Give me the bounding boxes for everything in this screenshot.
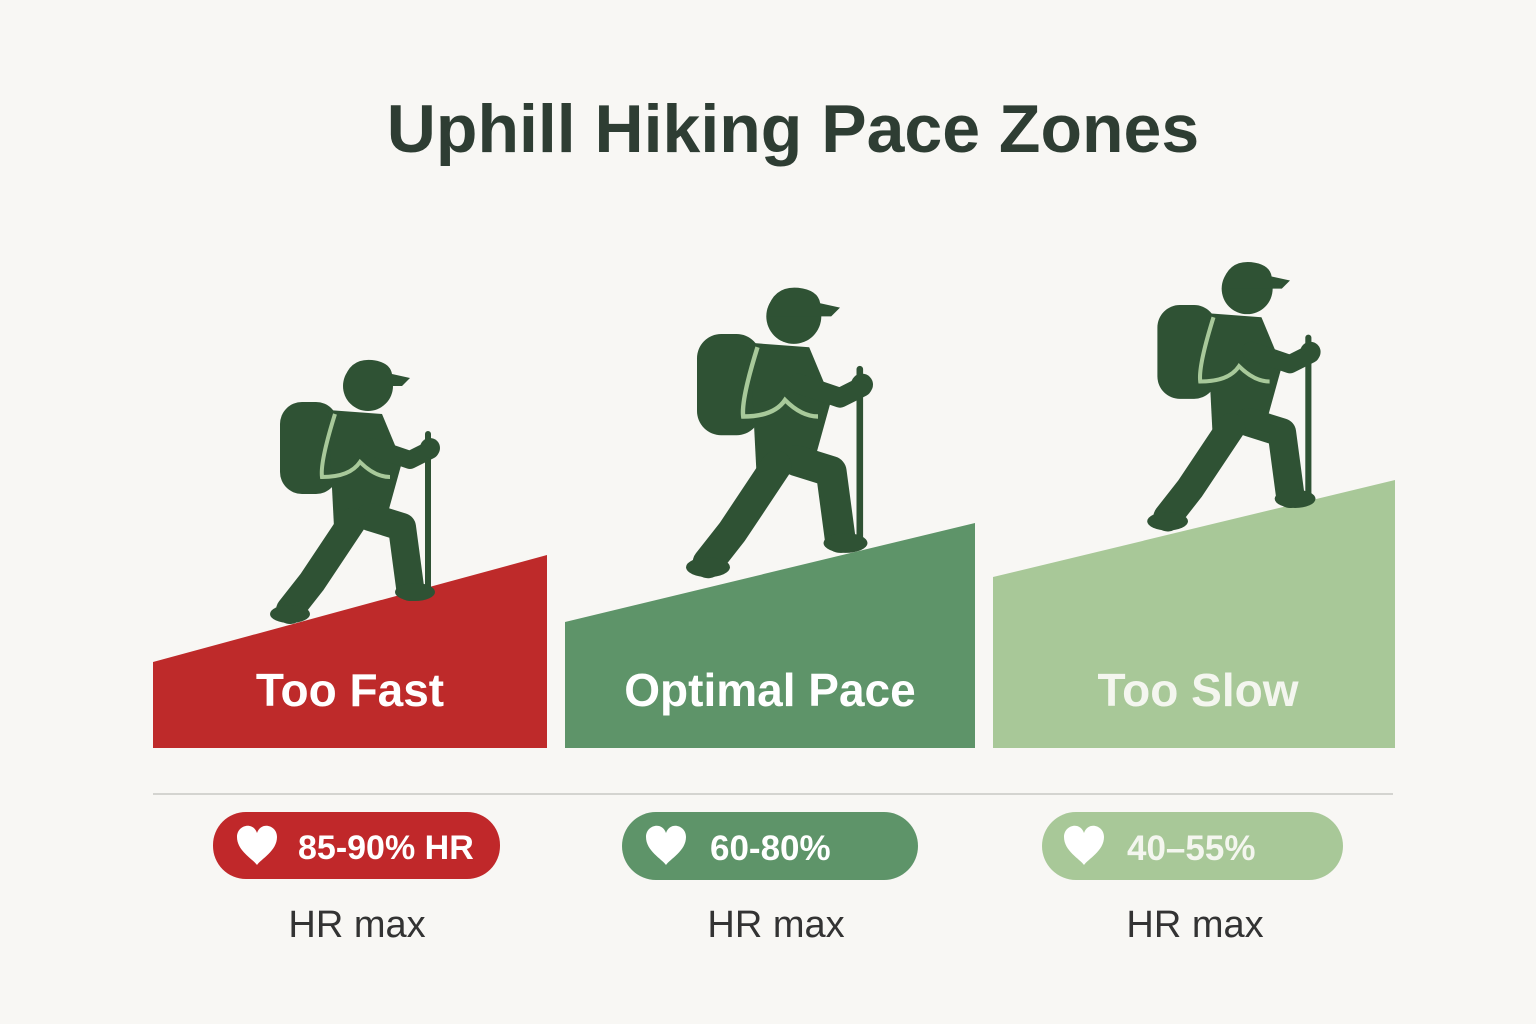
title: Uphill Hiking Pace Zones bbox=[387, 91, 1199, 167]
pill: too slow HR bbox=[1042, 812, 1343, 880]
icon: hiker too fast bbox=[270, 360, 440, 623]
label: too fast: Too Fast bbox=[256, 664, 444, 716]
ramp: optimal bbox=[565, 523, 975, 748]
pill: too fast HR: 85-90% HR bbox=[298, 829, 474, 867]
pill: optimal HR: 60-80% bbox=[710, 829, 831, 868]
icon: hiker too slow bbox=[1147, 262, 1321, 530]
icon: hiker optimal bbox=[686, 288, 873, 577]
ramp: too slow bbox=[993, 480, 1395, 748]
caption: HR max 1: HR max bbox=[288, 904, 426, 946]
ramp: too fast bbox=[153, 555, 547, 748]
pill: optimal HR bbox=[622, 812, 918, 880]
panel: optimal pace bbox=[565, 288, 975, 748]
caption: HR max 2: HR max bbox=[707, 904, 845, 946]
pill: too fast HR bbox=[213, 812, 500, 879]
label: optimal: Optimal Pace bbox=[624, 664, 916, 716]
panel: too fast bbox=[153, 360, 547, 748]
panel: too slow bbox=[993, 262, 1395, 748]
pill: too slow HR: 40–55% bbox=[1127, 829, 1255, 868]
caption: HR max 3: HR max bbox=[1126, 904, 1264, 946]
label: too slow: Too Slow bbox=[1097, 664, 1299, 716]
